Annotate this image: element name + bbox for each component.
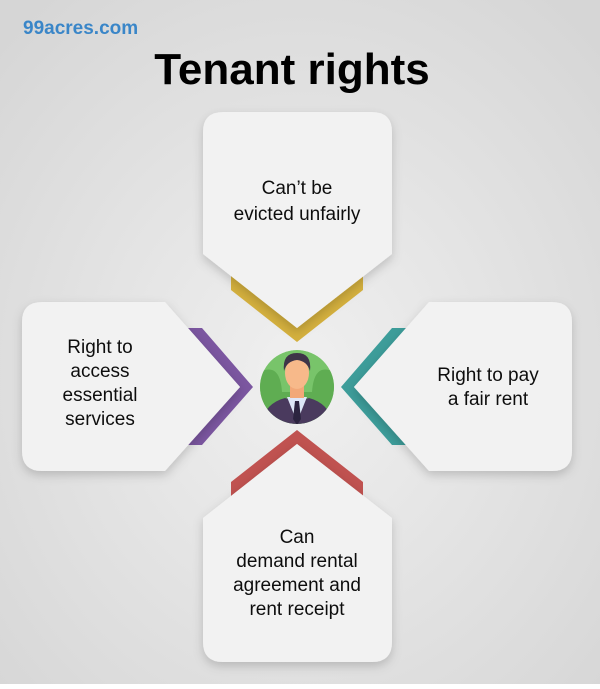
panel: bottom card <box>203 444 392 662</box>
panel: right card <box>354 302 572 471</box>
chevron: red <box>231 430 363 496</box>
text: bottom: agreement and <box>233 575 361 596</box>
text: left: access <box>70 361 130 382</box>
title: Tenant rights <box>154 45 430 94</box>
panel: top card <box>203 112 392 328</box>
text: right: Right to pay <box>437 365 539 386</box>
text: top: evicted unfairly <box>234 204 361 225</box>
text: right: a fair rent <box>448 389 529 410</box>
panel: left card <box>22 302 240 471</box>
text: left: services <box>65 409 135 430</box>
text: bottom: Can <box>280 527 314 548</box>
logo: 99acres.com <box>23 18 138 39</box>
chevron: teal <box>341 328 406 445</box>
icon: tenant avatar <box>260 350 334 424</box>
text: left: essential <box>62 385 138 406</box>
text: bottom: demand rental <box>236 551 358 572</box>
chevron: purple <box>188 328 253 445</box>
text: bottom: rent receipt <box>249 599 345 620</box>
text: top: Can’t be <box>262 178 332 199</box>
chevron: yellow <box>231 276 363 342</box>
text: left: Right to <box>67 337 133 358</box>
